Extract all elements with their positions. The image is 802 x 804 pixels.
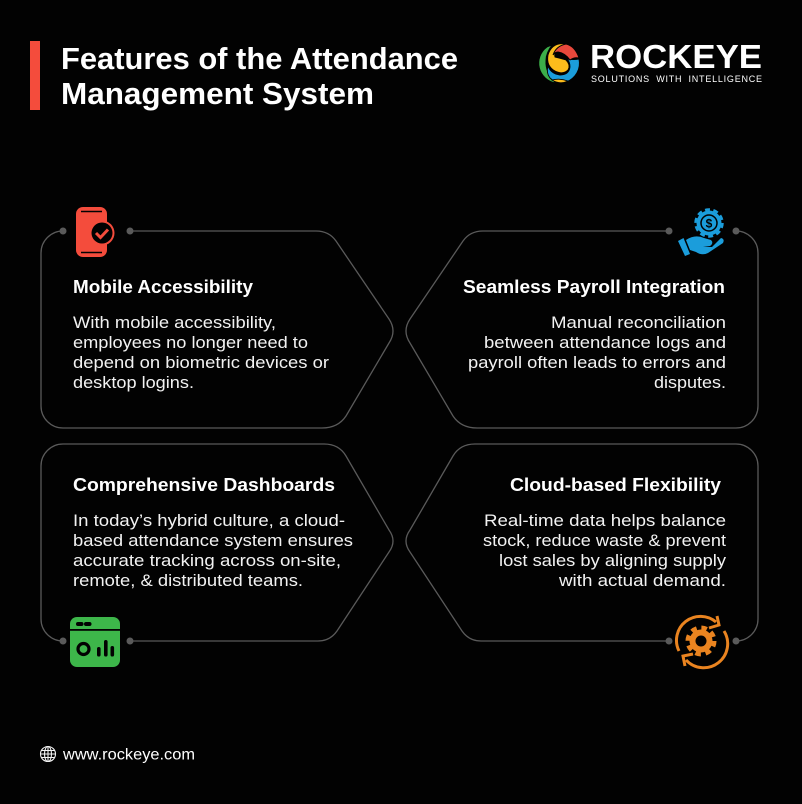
text block: disputes.	[654, 373, 726, 392]
text block: employees no longer need to	[73, 333, 308, 352]
text block: Real-time data helps balance	[484, 511, 726, 530]
heading: Comprehensive Dashboards	[73, 474, 335, 495]
icon: globe	[40, 746, 56, 762]
text block	[73, 511, 353, 590]
icon: mobile phone with check	[76, 207, 114, 257]
text block: with actual demand.	[558, 571, 726, 590]
title	[61, 41, 458, 111]
text block: based attendance system ensures	[73, 531, 353, 550]
logo: ROCKEYE	[590, 38, 762, 75]
title: Features of the Attendance	[61, 41, 458, 76]
text block: With mobile accessibility,	[73, 313, 276, 332]
text block: stock, reduce waste & prevent	[483, 531, 726, 550]
panel: seamless payroll integration	[406, 210, 758, 428]
logo	[539, 38, 762, 84]
text block: lost sales by aligning supply	[499, 551, 727, 570]
icon: hand holding coin gear	[678, 210, 724, 256]
icon: dashboard window	[70, 617, 120, 667]
heading: Cloud-based Flexibility	[510, 474, 722, 495]
text block	[73, 313, 329, 392]
panel: comprehensive dashboards	[41, 444, 393, 667]
text block: In today’s hybrid culture, a cloud-	[73, 511, 345, 530]
logo swirl	[539, 44, 579, 83]
logo: SOLUTIONS WITH INTELLIGENCE	[591, 74, 762, 84]
text block: depend on biometric devices or	[73, 353, 329, 372]
text block	[483, 511, 727, 590]
text block: Manual reconciliation	[551, 313, 726, 332]
title: Management System	[61, 76, 374, 111]
text block: accurate tracking across on-site,	[73, 551, 341, 570]
panel: mobile accessibility	[41, 207, 393, 428]
text block: desktop logins.	[73, 373, 194, 392]
heading: Seamless Payroll Integration	[463, 276, 725, 297]
accent bar	[30, 41, 40, 110]
text block: between attendance logs and	[484, 333, 726, 352]
text block: payroll often leads to errors and	[468, 353, 726, 372]
text block	[468, 313, 726, 392]
icon: hand holding coin gear: $	[706, 216, 713, 230]
footer: website: www.rockeye.com	[62, 746, 195, 764]
heading: Mobile Accessibility	[73, 276, 254, 297]
panel: cloud-based flexibility	[406, 444, 758, 668]
text block: remote, & distributed teams.	[73, 571, 303, 590]
icon: rotating gear	[676, 616, 728, 668]
